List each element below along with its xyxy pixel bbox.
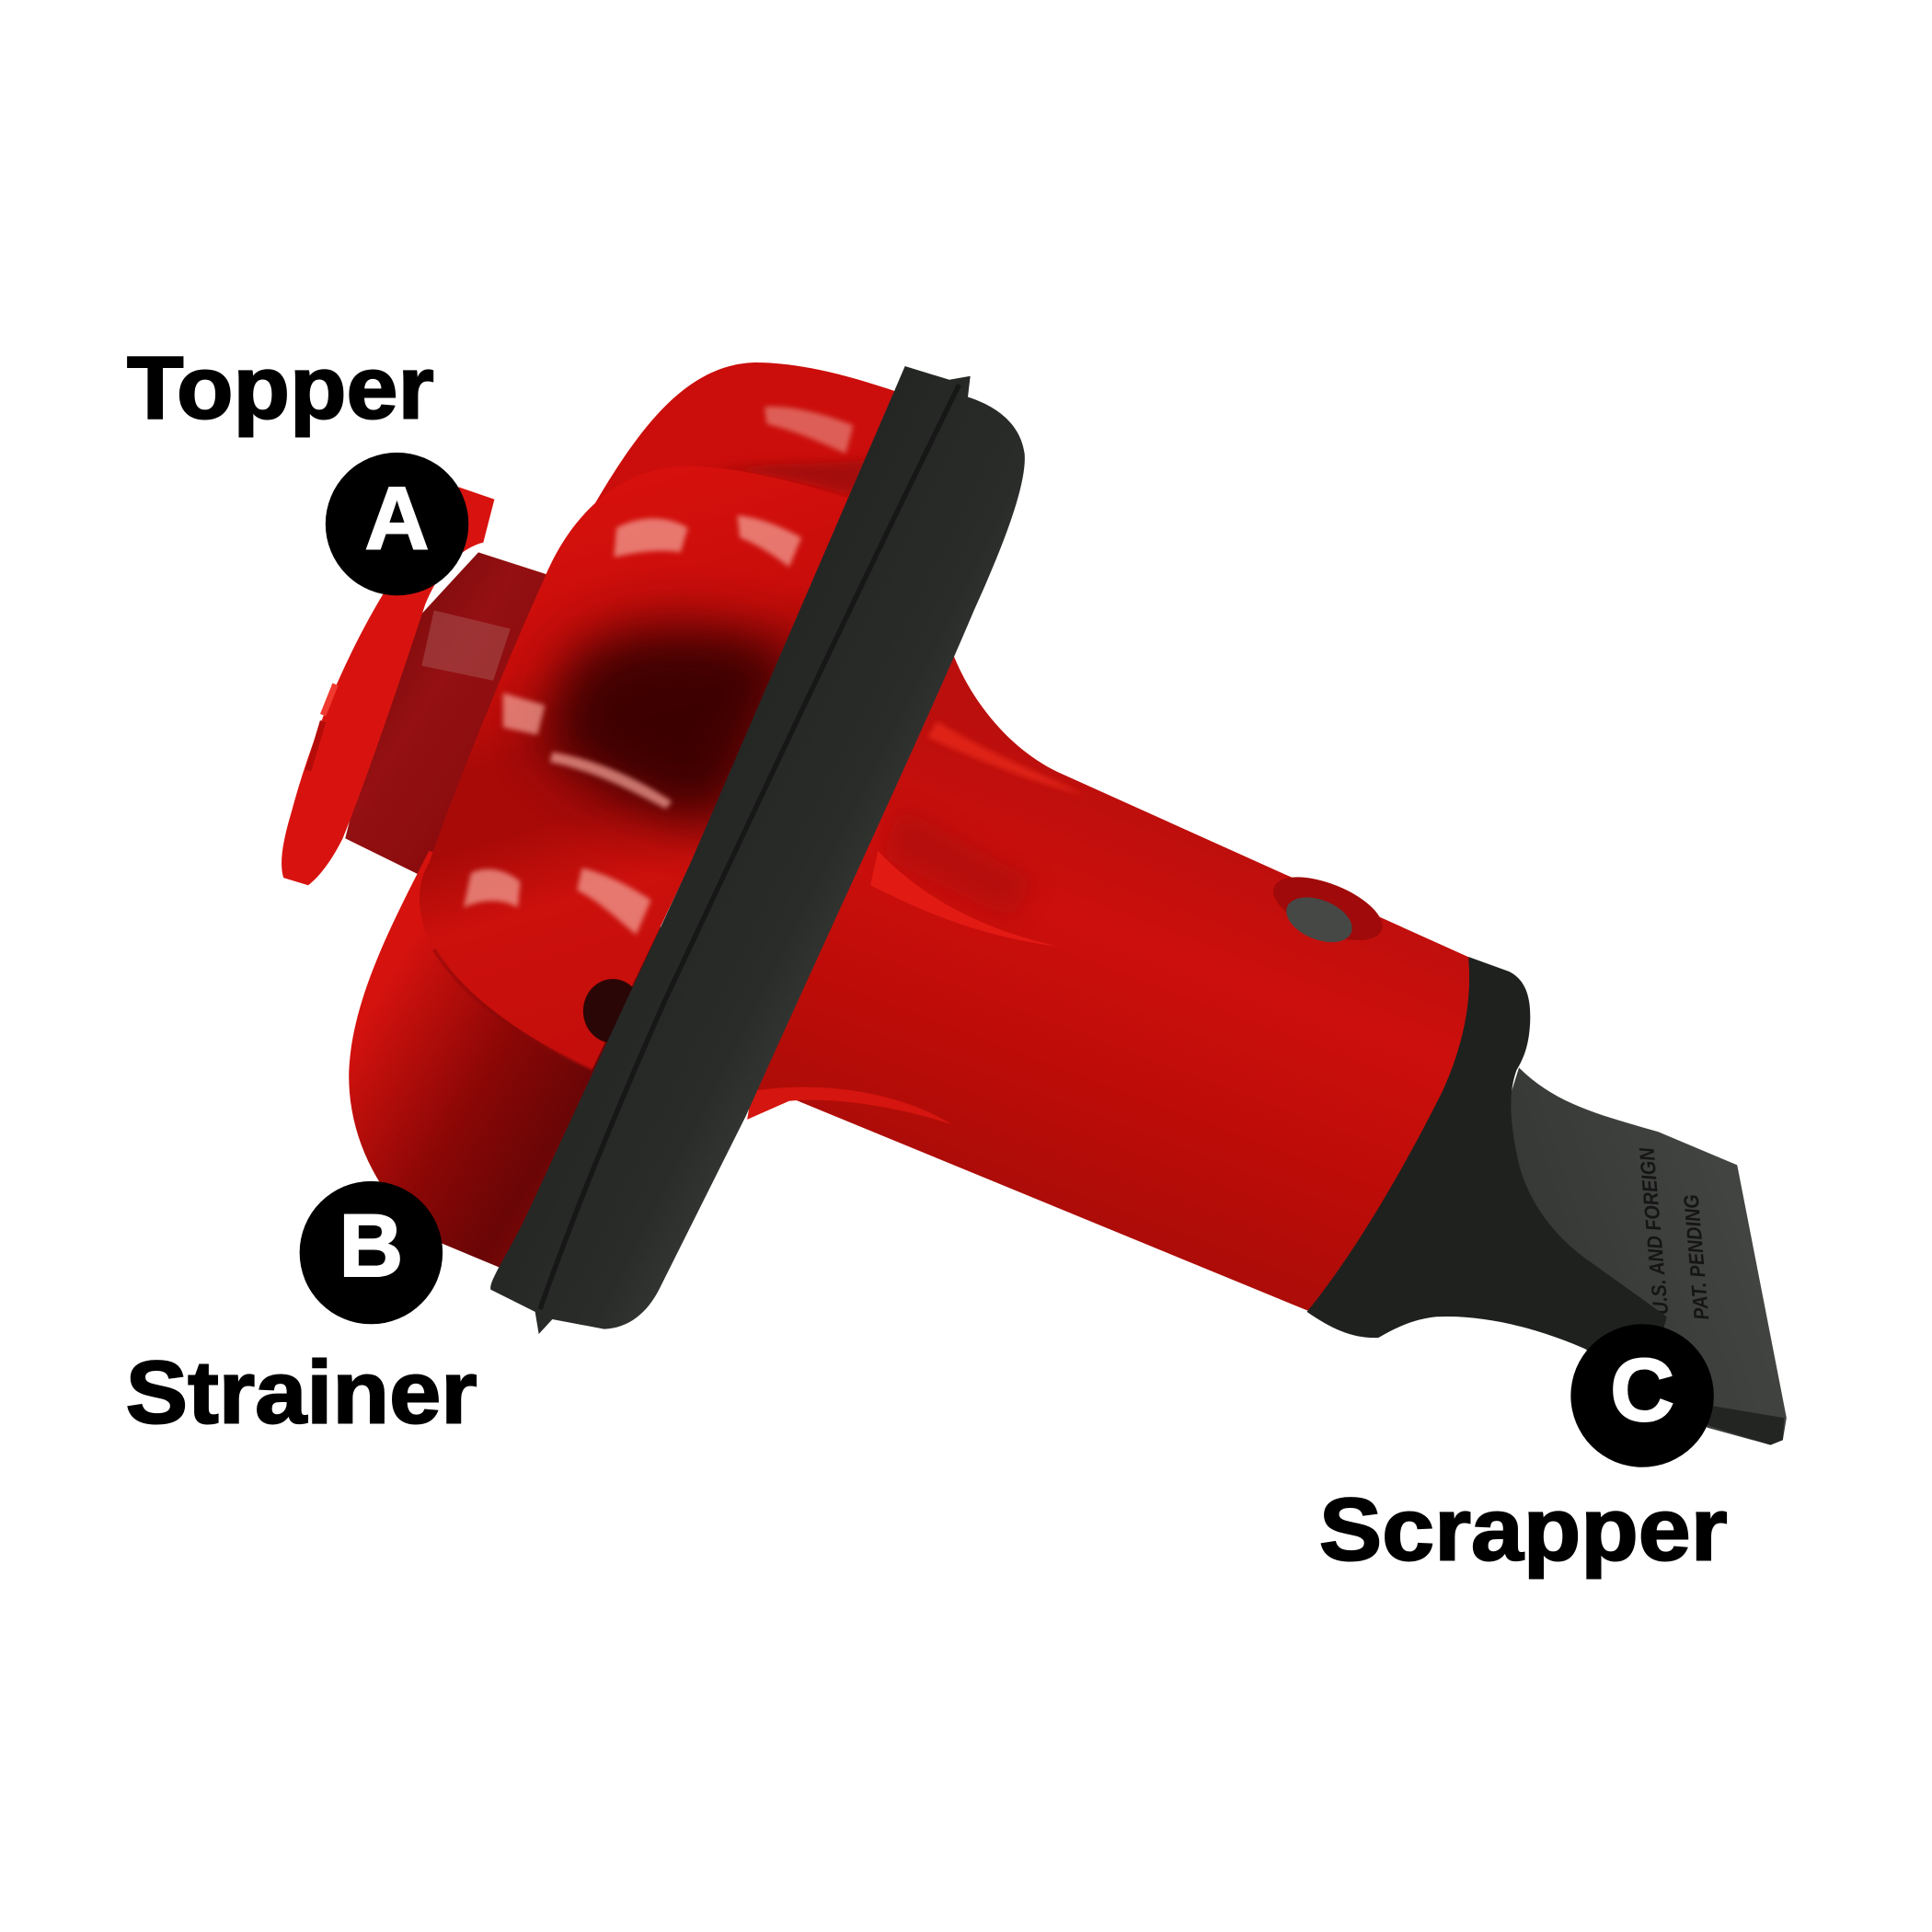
marker B	[300, 1181, 443, 1324]
vent hole	[1265, 864, 1391, 953]
blade imprint	[1634, 1146, 1713, 1321]
handle body	[690, 651, 1474, 1312]
marker B: B	[339, 1197, 403, 1295]
scraper collar	[1307, 957, 1667, 1369]
blade imprint: U.S. AND FOREIGN	[1634, 1146, 1673, 1316]
highlights	[464, 515, 801, 935]
topper disc	[282, 487, 511, 885]
blade imprint: PAT. PENDING	[1679, 1193, 1713, 1321]
scraper blade	[1467, 1068, 1787, 1445]
strainer	[349, 362, 898, 1270]
back lobe	[580, 362, 898, 530]
lobe seam	[434, 949, 592, 1070]
rubber ring	[490, 366, 1025, 1334]
bottom lobe	[349, 851, 690, 1270]
product diagram	[127, 356, 1787, 1579]
marker C	[1570, 1324, 1714, 1467]
label: Strainer: Strainer	[126, 1344, 477, 1443]
marker A: A	[365, 469, 429, 568]
label: Topper: Topper	[127, 339, 434, 437]
label: Scrapper: Scrapper	[1319, 1480, 1728, 1579]
marker C: C	[1610, 1341, 1674, 1440]
front lobes	[420, 466, 863, 1070]
topper neck	[345, 552, 555, 888]
strainer hole	[583, 979, 642, 1043]
marker A	[326, 453, 468, 595]
lobe shadow	[543, 624, 801, 826]
